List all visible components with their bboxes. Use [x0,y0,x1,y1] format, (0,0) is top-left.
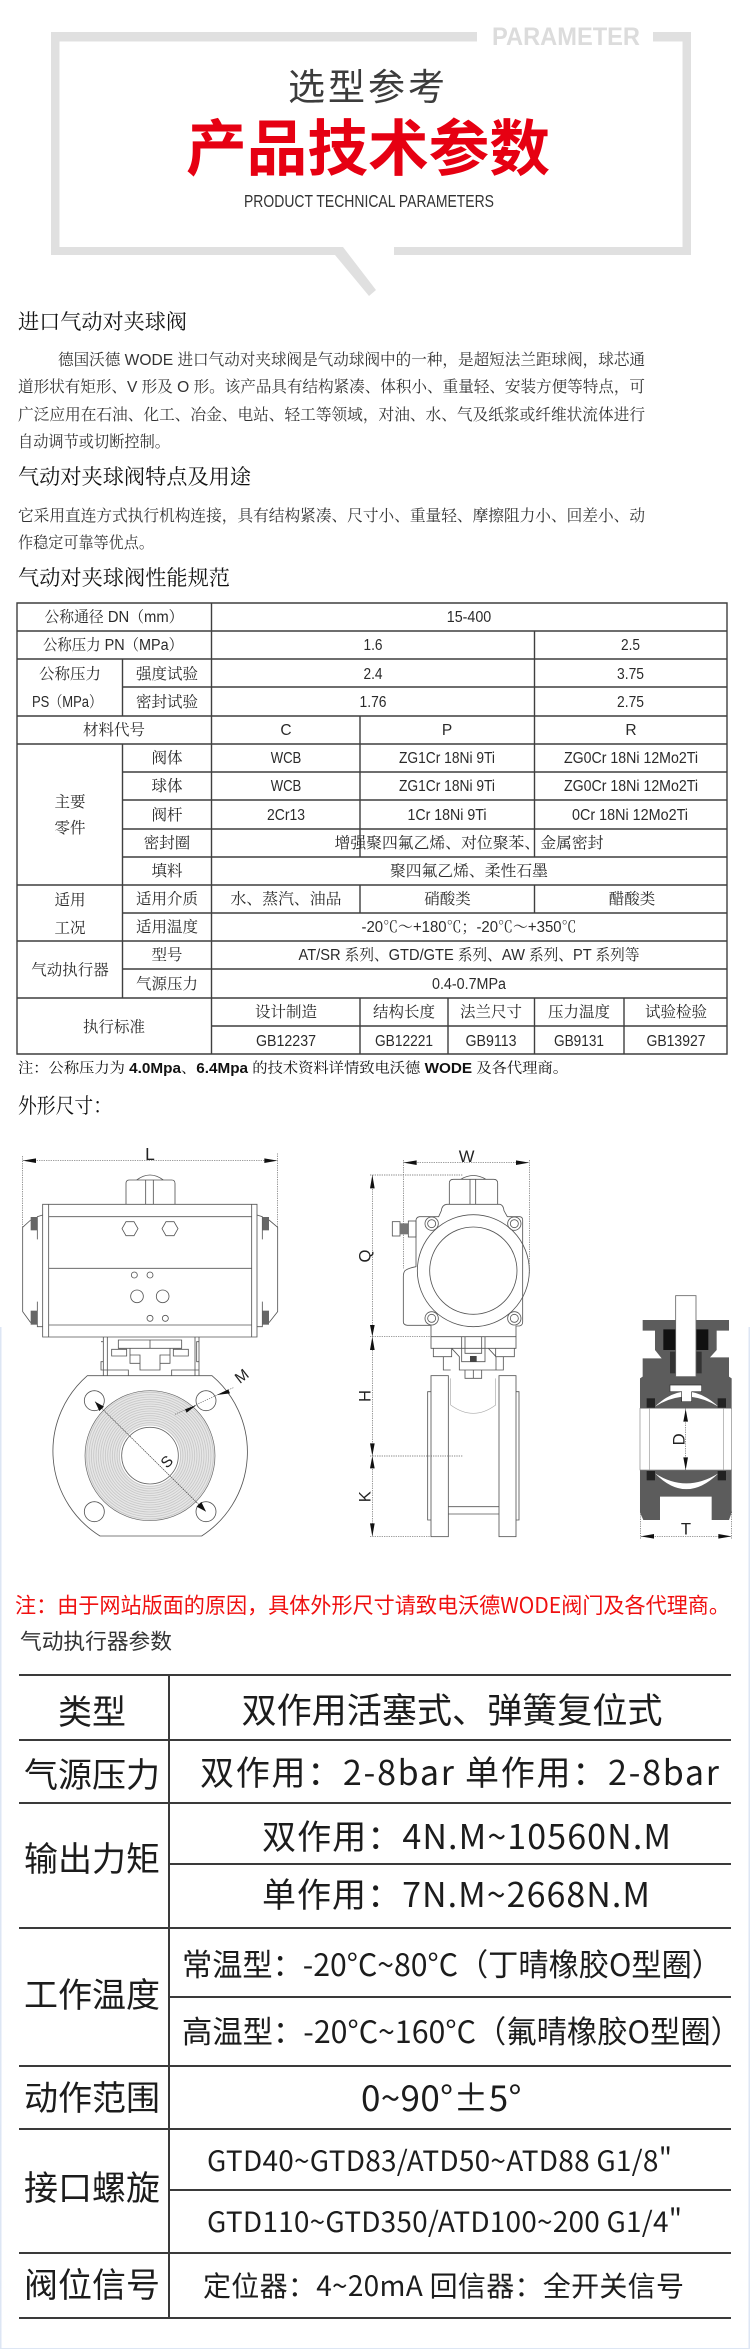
row: material code: P [442,722,452,739]
speech bubble frame [51,32,691,296]
dimensions Q H K: Q [355,1249,374,1262]
subtitle: PRODUCT TECHNICAL PARAMETERS [244,191,494,211]
diagram: cross section with dimensions D and T [640,1296,732,1539]
heading: performance specification: 气动对夹球阀性能规范 [18,567,230,590]
row group: main parts: 主要 [54,793,86,811]
heading: features and uses: 气动对夹球阀特点及用途 [18,466,251,489]
dimension M [175,1366,252,1414]
row group: standards: 压力温度 [548,1003,610,1021]
row group: main parts: WCB [271,750,301,767]
row: output torque: 单作用：7N.M~2668N.M [262,1868,650,1917]
row group: test pressure: 密封试验 [136,693,198,711]
row group: pneumatic actuator [31,946,640,993]
header panel [51,23,691,296]
row group: test pressure: PS（MPa） [32,694,102,711]
diagram: side view [355,1147,529,1537]
dimension M: M [232,1366,252,1387]
row: position signal: 阀位信号 [24,2258,160,2307]
diagram: front view with flange [23,1144,278,1536]
table footnote: 注：公称压力为 4.0Mpa、6.4Mpa 的技术资料详情致电沃德 WODE 及各代理商。 [18,1059,568,1077]
dimension L: L [145,1144,155,1164]
row: output torque [24,1810,671,1917]
row group: main parts: 填料 [151,861,183,880]
row: air source pressure: 双作用：2-8bar 单作用：2-8bar [200,1746,720,1795]
intro paragraph: 自动调节或切断控制。 [18,433,170,451]
red website note: 注：由于网站版面的原因，具体外形尺寸请致电沃德WODE阀门及各代理商。 [15,1589,730,1620]
row group: test pressure: 强度试验 [136,665,198,683]
row group: working conditions: 适用温度 [136,918,198,936]
row group: test pressure [32,665,644,711]
row: action range: 0~90°±5° [361,2071,522,2122]
row group: main parts: WCB [271,778,301,795]
row group: working conditions: -20℃～+180℃；-20℃～+350℃ [362,919,576,936]
row group: test pressure: 公称压力 [39,665,101,683]
page edge tint [0,1327,750,2349]
row group: main parts: ZG0Cr 18Ni 12Mo2Ti [564,750,698,767]
intro paragraph: 德国沃德 WODE 进口气动对夹球阀是气动球阀中的一种，是超短法兰距球阀，球芯通 [58,350,645,369]
features paragraph: 作稳定可靠等优点。 [18,534,154,552]
row group: main parts: ZG0Cr 18Ni 12Mo2Ti [564,778,698,795]
row: output torque: 双作用：4N.M~10560N.M [262,1810,671,1859]
row: type: 双作用活塞式、弹簧复位式 [242,1683,662,1734]
actuator body [43,1204,257,1337]
row group: pneumatic actuator: 型号 [151,946,183,964]
row group: pneumatic actuator: 气动执行器 [31,961,109,979]
row: type: 类型 [58,1685,126,1734]
actuator side housing [403,1175,529,1337]
adjusting screw [392,1221,416,1237]
row group: test pressure: 2.4 [364,666,383,683]
row: port thread: 接口螺旋 [24,2161,160,2210]
flange plates [428,1376,519,1537]
intro paragraph [18,350,645,451]
row: port thread: GTD110~GTD350/ATD100~200 G1/4" [207,2201,682,2241]
features paragraph: 它采用直连方式执行机构连接，具有结构紧凑、尺寸小、重量轻、摩擦阻力小、回差小、动 [18,507,645,525]
dimension D: D [669,1433,688,1445]
row group: main parts: 阀体 [151,749,183,767]
row: working temperature: 常温型：-20°C~80°C（丁晴橡胶O型圈） [182,1940,722,1985]
row group: pneumatic actuator: 0.4-0.7MPa [432,976,506,993]
heading: outline dimensions: 外形尺寸： [18,1095,112,1118]
dimension D [669,1408,688,1470]
row group: standards: 法兰尺寸 [460,1003,522,1021]
row group: standards: 设计制造 [255,1003,317,1021]
row group: main parts [54,749,698,880]
row: nominal diameter: 公称通径 DN（mm） [44,608,184,626]
dimension T: T [681,1520,691,1539]
row group: standards: GB13927 [646,1033,706,1050]
row: nominal diameter [44,608,492,626]
actuator top cap [126,1175,175,1204]
table grid [19,1675,731,2318]
row group: working conditions: 水、蒸汽、油品 [230,890,342,908]
heading: actuator parameters: 气动执行器参数 [20,1625,172,1656]
dimension S [95,1402,206,1512]
row: output torque: 输出力矩 [24,1832,160,1881]
row: air source pressure: 气源压力 [24,1748,160,1797]
row group: main parts: 阀杆 [151,806,183,824]
dimensions Q H K: K [355,1491,374,1502]
row: nominal pressure: 公称压力 PN（MPa） [43,636,183,654]
sealing face rings [85,1391,215,1521]
row: material code: R [625,722,637,739]
row group: working conditions [54,890,655,937]
row: position signal [24,2258,684,2307]
actuator parameters table [19,1675,741,2318]
row: material code [83,721,637,739]
row group: working conditions: 醋酸类 [609,890,655,908]
row group: main parts: 0Cr 18Ni 12Mo2Ti [572,807,688,824]
bracket and coupling [431,1337,516,1378]
row group: standards: 试验检验 [645,1003,707,1021]
row group: main parts: 零件 [54,819,86,837]
row: port thread [24,2140,682,2241]
dimensions Q H K: H [355,1390,374,1402]
parameter watermark: PARAMETER [492,23,640,51]
row group: main parts: ZG1Cr 18Ni 9Ti [399,750,495,767]
row: nominal pressure: 2.5 [621,637,640,654]
row group: standards: 执行标准 [83,1018,145,1036]
row group: working conditions: 工况 [54,919,86,937]
row: working temperature: 高温型：-20°C~160°C（氟晴橡胶O型圈） [182,2007,741,2052]
row group: standards: GB12237 [256,1033,316,1050]
dimension L [23,1144,278,1228]
row group: working conditions: 硝酸类 [424,890,471,908]
bolt holes [84,1391,216,1522]
title: 产品技术参数 [186,99,550,188]
mounting bracket [101,1337,199,1376]
row group: test pressure: 1.76 [360,694,386,711]
row group: standards: GB9131 [554,1033,604,1050]
dimension W: W [459,1147,475,1166]
row group: main parts: 密封圈 [144,834,190,852]
row group: main parts: 2Cr13 [267,807,305,824]
dimension W [403,1147,529,1273]
row group: test pressure: 3.75 [617,666,644,683]
row group: main parts: 增强聚四氟乙烯、对位聚苯、金属密封 [334,833,604,852]
performance specification table [17,603,727,1054]
dimension T [641,1512,732,1539]
table grid [17,603,727,1054]
row: nominal pressure: 1.6 [364,637,382,654]
row group: standards: 结构长度 [373,1003,435,1021]
row group: main parts: ZG1Cr 18Ni 9Ti [399,778,495,795]
row group: main parts: 球体 [151,777,183,795]
ball bore and crescents [640,1392,732,1489]
row group: standards: GB9113 [466,1033,516,1050]
row group: standards: GB12221 [375,1033,433,1050]
row: position signal: 定位器：4~20mA 回信器：全开关信号 [203,2265,684,2305]
row: port thread: GTD40~GTD83/ATD50~ATD88 G1/8" [207,2140,672,2180]
features paragraph [18,507,645,552]
section: introduction [18,311,645,451]
row: type [58,1683,662,1734]
row group: main parts: 1Cr 18Ni 9Ti [408,807,486,824]
section: features and uses [18,466,645,552]
row: action range: 动作范围 [24,2071,160,2120]
heading: imported pneumatic wafer ball valve: 进口气动对夹球阀 [18,311,187,334]
row group: pneumatic actuator: 气源压力 [136,975,198,993]
row group: standards [83,1003,707,1050]
row: nominal diameter: 15-400 [447,609,492,626]
actuator end caps [23,1215,278,1327]
row: action range [24,2071,522,2122]
intro paragraph: 广泛应用在石油、化工、冶金、电站、轻工等领域，对油、水、气及纸浆或纤维状流体进行 [18,406,645,424]
stem [663,1296,708,1402]
heading: selection reference: 选型参考 [288,57,445,111]
flange plate [53,1376,247,1536]
row group: main parts: 聚四氟乙烯、柔性石墨 [390,861,548,880]
row: material code: C [280,722,292,739]
row group: working conditions: 适用介质 [136,890,198,908]
row group: test pressure: 2.75 [617,694,644,711]
row: working temperature: 工作温度 [24,1968,160,2017]
row group: working conditions: 适用 [54,891,86,909]
dimensions Q H K [355,1175,463,1537]
intro paragraph: 道形状有矩形、V 形及 O 形。该产品具有结构紧凑、体积小、重量轻、安装方便等特点，可 [18,378,645,396]
row: material code: 材料代号 [83,721,145,739]
row group: pneumatic actuator: AT/SR 系列、GTD/GTE 系列、AW 系列、PT 系列等 [298,946,640,964]
row: working temperature [24,1940,741,2052]
row: nominal pressure [43,636,640,654]
dimension S: S [158,1453,177,1472]
valve body section [640,1320,732,1520]
